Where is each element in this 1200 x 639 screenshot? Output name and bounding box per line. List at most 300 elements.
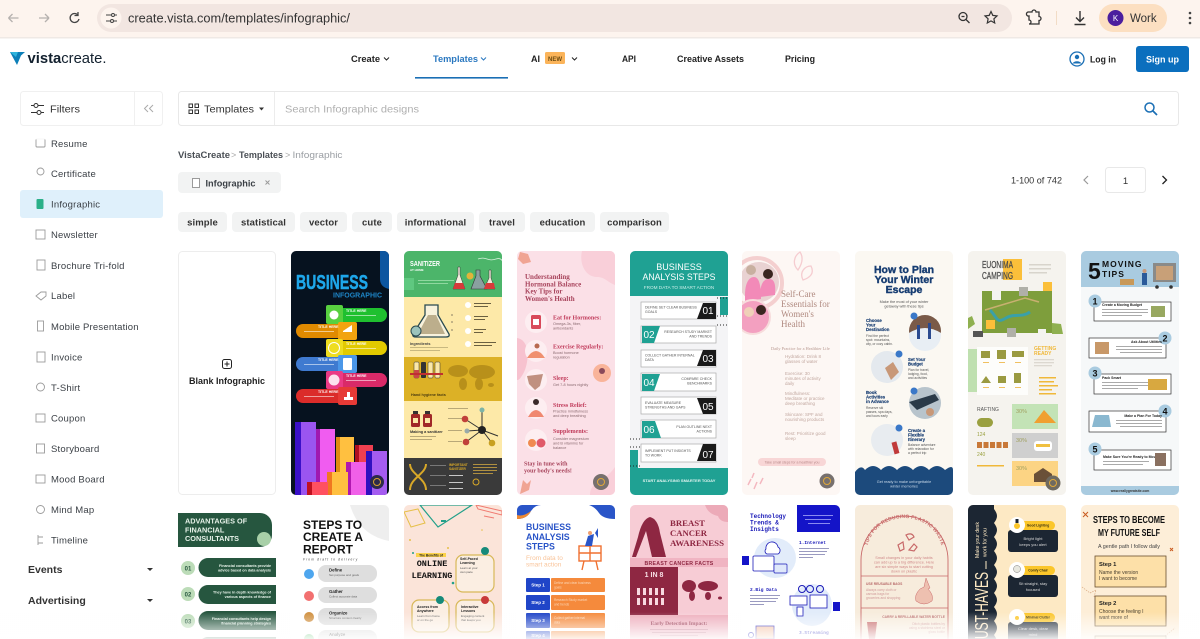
template card: self-care essentials: Rest: Prioritize good [785, 431, 826, 436]
tag chips: vector [309, 218, 338, 228]
list rows: 03 [185, 620, 192, 626]
tip boxes [1089, 302, 1171, 470]
list rows: They have in depth knowledge of [213, 590, 272, 594]
template card: technology trends: 1.Internet [799, 540, 826, 546]
desk items: mind [1029, 632, 1037, 637]
template card: self-care essentials: Take small steps for a healthier you [765, 460, 819, 464]
template card: reducing plastic waste: groceries and shopping [866, 596, 900, 600]
tips: antioxidants [553, 326, 573, 330]
tips: Supplements: [553, 429, 588, 435]
template card: sanitizer: SANITIZER [410, 259, 440, 268]
top navigation: Pricing [785, 54, 815, 65]
logo: vistacreate: vistacreate. [28, 50, 106, 67]
template card: winter escape: Itinerary [908, 437, 926, 442]
desk items: Minimal Clutter [1026, 616, 1051, 620]
template card: moving tips: Make a Plan For Today [1124, 414, 1162, 418]
template card: business analysis steps orange: Step 2 [531, 600, 545, 605]
template card: online learning [404, 505, 502, 639]
step boxes [1095, 556, 1166, 639]
dna [410, 464, 426, 490]
sidebar categories: Timeline [51, 536, 88, 546]
tips: Practice mindfulness [553, 410, 588, 414]
template card: self-care essentials: Mindfulness: [785, 391, 810, 396]
tips: Get 7-8 hours nightly [553, 383, 588, 387]
template card: financial consultants: CONSULTANTS [185, 534, 239, 543]
template card: reducing plastic waste: canvas bags for [866, 592, 890, 596]
tips [553, 316, 603, 450]
profile chip: Work [1130, 13, 1157, 25]
template card: business analysis steps orange: goals [554, 586, 562, 590]
sign up button: Sign up [1146, 54, 1179, 66]
step boxes: Step 1 [1099, 562, 1117, 568]
flasks [453, 258, 503, 289]
desk items: Clear desk, clear [1018, 626, 1049, 631]
template card: business analysis steps: 06 [643, 425, 655, 436]
sidebar categories: Invoice [51, 352, 83, 364]
template card: business analysis steps: 07 [702, 450, 714, 461]
template card: desk must-haves: Make your desk [975, 521, 981, 558]
list rows: Financial consultants provide [219, 564, 271, 568]
template card: reducing plastic waste: glass bottle [928, 630, 945, 634]
tips: regulation [553, 356, 570, 360]
template card: winter escape: getaway with these tips [884, 304, 924, 308]
dotted decorations [630, 297, 728, 468]
template card: business analysis steps orange: Define and clear business [554, 581, 591, 585]
template card: sanitizer [404, 251, 503, 495]
template card: self-care essentials: Skincare: SPF and [785, 412, 823, 417]
template card: business analysis steps orange: smart action [526, 562, 562, 568]
top navigation: API [622, 54, 636, 65]
search box: Templates [204, 104, 254, 116]
breadcrumb: > [231, 150, 236, 160]
template card: technology trends: Insights [750, 526, 779, 533]
breadcrumb: > [285, 150, 290, 160]
big flask [411, 305, 453, 337]
template card: online learning: LEARNING [412, 571, 452, 581]
steps [641, 302, 716, 462]
list rows: 02 [185, 592, 192, 598]
selected item background [20, 190, 163, 218]
template card: winter escape: How to Plan [874, 264, 934, 276]
template card: euonima camping: GETTING [1034, 346, 1056, 352]
template card: business analysis steps orange: BUSINESS [526, 522, 571, 532]
template card: steps to create a report: Gather [329, 589, 343, 594]
template card: business analysis steps: 05 [702, 402, 714, 413]
login: Log in [1090, 54, 1116, 66]
top navigation: AI [531, 54, 540, 65]
template card: winter escape: Budget [908, 362, 923, 366]
template card: business analysis steps: PLAN OUTLINE NEXT [676, 425, 713, 429]
template card: reducing plastic waste: Small changes in your daily habits [875, 556, 933, 560]
template card: sanitizer: SANITIZER [449, 467, 467, 471]
template card: steps to create a report: Collect accurate data [329, 594, 358, 598]
template card: self-care essentials: Essentials for [781, 299, 830, 309]
template card: winter escape: Get ready to make unforgettable [877, 480, 931, 484]
template card: business analysis steps: 03 [702, 354, 714, 365]
template card: winter escape: Plan for travel, [908, 368, 929, 372]
template card: self-care essentials: Daily Practice for a Healthier Life [771, 346, 830, 351]
template card: business analysis steps: IMPLEMENT PUT INSIGHTS [645, 449, 691, 453]
numbered circles: 2 [1162, 334, 1168, 344]
step boxes: Choose the feeling I [1099, 609, 1143, 615]
icon: zoom [959, 12, 970, 23]
icon: site settings [100, 8, 122, 28]
ribbons: TITLE HERE [318, 325, 339, 329]
heading: Hormonal Balance [525, 280, 581, 288]
template card: online learning: Engaging content [461, 614, 485, 618]
template card: steps to become my future self [1081, 505, 1179, 639]
template card: winter escape: in Advance [866, 399, 889, 404]
template card: business analysis steps: GOALS [645, 310, 658, 314]
template card: online learning: Lessons [461, 609, 475, 613]
tag chips: comparison [607, 218, 662, 228]
list rows: various aspects of finance [225, 595, 271, 599]
template card: winter escape: Choose [866, 318, 882, 323]
step boxes: Step 2 [1099, 601, 1116, 607]
template card: business analysis steps: AND TRENDS [689, 334, 713, 338]
icon: menu dots [1189, 12, 1191, 24]
template card: winter escape: winter memories [890, 484, 918, 488]
template card: online learning: Learn at your [460, 566, 478, 570]
sidebar categories: Certificate [51, 169, 96, 180]
template card: online learning: or on the go [417, 618, 433, 622]
template card: winter escape: Create a [908, 428, 926, 433]
template card: online learning: Learn from home [417, 614, 440, 618]
blank infographic card [178, 252, 276, 494]
template card: moving tips: MOVING [1102, 259, 1142, 269]
sidebar categories: T-Shirt [51, 383, 81, 394]
top navigation: Create [351, 54, 380, 65]
tag chips: statistical [241, 218, 286, 228]
ribbons: TITLE HERE [346, 374, 367, 378]
template card: moving tips: Make Sure You're Ready to Move [1103, 455, 1158, 459]
filters box [20, 92, 162, 126]
template card: self-care essentials: glasses of water [785, 359, 818, 364]
ribbons [296, 305, 387, 405]
template card: euonima camping: READY [1034, 351, 1052, 357]
list rows: advice based on data analysis [218, 568, 271, 572]
moving truck [1120, 263, 1176, 289]
step boxes: Name the version [1099, 570, 1138, 576]
numbered circles: 3 [1092, 368, 1098, 378]
stat boxes: 30% [1016, 438, 1027, 444]
template card: euonima camping [968, 251, 1066, 495]
sidebar categories: Mobile Presentation [51, 322, 139, 333]
tips: Omega-3s, fiber, [553, 322, 581, 326]
template card: business analysis steps: ANALYSIS STEPS [642, 272, 716, 282]
template card: online learning: Access from [417, 605, 438, 609]
template card: self-care essentials: Women's [781, 309, 814, 319]
template card: business analysis steps: RESEARCH STUDY MARKET [664, 330, 713, 334]
icon: back arrow [8, 14, 18, 22]
template card: online learning: Self-Paced [460, 557, 478, 561]
template card: winter escape: spot: mountains, [866, 338, 890, 342]
desk items: Comfy Chair [1028, 568, 1049, 572]
breadcrumb: VistaCreate [178, 150, 230, 161]
url text: create.vista.com/templates/infographic/ [128, 12, 351, 26]
template card: steps to become my future self: STEPS TO BECOME [1093, 514, 1165, 526]
desk items: Bright light [1024, 536, 1043, 541]
template card: steps to create a report: Analyze [329, 632, 346, 637]
template card: technology trends: 3.Streaming [799, 630, 829, 636]
sidebar categories: Events [28, 564, 63, 576]
sidebar categories: Coupon [51, 414, 85, 424]
breadcrumb [178, 150, 343, 161]
vials [410, 362, 443, 378]
blank infographic card: Blank Infographic [189, 376, 265, 387]
tag chips: cute [362, 218, 382, 228]
sign up button [1136, 46, 1189, 72]
sidebar categories: Mind Map [51, 505, 94, 516]
template card: breast cancer awareness [630, 505, 728, 639]
template card: reducing plastic waste [855, 505, 953, 639]
template card: business analysis steps orange: From data to [526, 555, 563, 562]
template card: winter escape: Make the most of your winter [880, 300, 929, 304]
template card: self-care essentials: daily [785, 381, 795, 386]
sidebar categories: Infographic [51, 200, 100, 210]
template card: moving tips: www.reallygreatsite.com [1110, 489, 1149, 493]
pagination [1011, 168, 1166, 192]
top navigation: NEW [548, 57, 562, 63]
template card: business analysis steps: COLLECT GATHER INTERNAL [645, 354, 695, 358]
template card: winter escape: Activities [866, 394, 886, 400]
template card: business infographic [291, 251, 389, 495]
template card: winter escape: Flexible [908, 432, 925, 438]
template card: business analysis steps orange: Step 3 [531, 618, 545, 623]
template card: sanitizer: Making a sanitizer [410, 430, 443, 434]
top navigation [351, 52, 815, 79]
tips: and deep breathing [553, 414, 586, 418]
template card: breast cancer awareness: 1 IN 8 [645, 572, 663, 579]
template card: business analysis steps: BUSINESS [656, 262, 702, 272]
template card: breast cancer awareness: Early Detection Impact: [651, 621, 708, 627]
template card: business analysis steps orange: data [554, 620, 560, 624]
template card: self-care essentials: Hydration: Drink 8 [785, 354, 822, 359]
tips: balance [553, 446, 566, 450]
3d bars [295, 422, 387, 495]
active filter chip [178, 172, 281, 193]
template card: steps to create a report [303, 505, 389, 639]
desk items: focused [1026, 587, 1040, 592]
template card: steps to create a report: Set purpose and goals [329, 573, 360, 577]
filters box: Filters [50, 104, 80, 116]
tips: Eat for Hormones: [553, 316, 601, 322]
numbered circles: 4 [1162, 406, 1168, 416]
template card: self-care essentials: Health [781, 319, 805, 329]
template card: online learning: Learning [460, 561, 475, 565]
template card: financial consultants [178, 505, 276, 639]
heading: Key Tips for [525, 288, 562, 296]
heading [525, 273, 581, 303]
template card: hormonal balance [517, 251, 615, 495]
ribbons: TITLE HERE [318, 358, 339, 362]
browser toolbar [0, 0, 1200, 38]
template card: business analysis steps: STRENGTHS AND GAPS [645, 406, 686, 410]
stat boxes [1012, 404, 1058, 486]
template card: business analysis steps orange: Step 1 [531, 582, 545, 588]
stat boxes: 30% [1016, 409, 1027, 415]
heading: Women's Health [525, 295, 575, 303]
template card: self-care essentials: Self-Care [781, 289, 815, 299]
template card: business infographic: BUSINESS [296, 272, 368, 294]
template card: self-care essentials: Meditate or practice [785, 396, 825, 401]
numbered circles: 5 [1092, 444, 1098, 454]
icons [916, 578, 932, 604]
sidebar categories: Advertising [28, 595, 86, 607]
world map [682, 580, 722, 601]
template card: online learning: Anywhere [417, 609, 434, 613]
template card: business analysis steps: 04 [643, 378, 655, 389]
template card: online learning: own pace [460, 570, 473, 574]
ribbons: TITLE HERE [318, 390, 339, 394]
template card: winter escape: with relaxation for [908, 447, 935, 451]
template card: winter escape: Escape [886, 284, 923, 296]
template card: breast cancer awareness: CANCER [670, 528, 708, 538]
template card: steps to create a report: CREATE A [303, 530, 363, 544]
template card: business analysis steps orange: Research Study market [554, 598, 587, 602]
tips: Sleep: [553, 376, 569, 382]
template card: steps to create a report: Structure content clearly [329, 616, 362, 620]
template card: moving tips [1081, 251, 1179, 495]
template card: breast cancer awareness: AWARENESS [670, 538, 724, 548]
bottles [411, 411, 432, 427]
active filter chip: Infographic [206, 178, 256, 190]
template card: online learning: The Benefits of [419, 554, 444, 558]
template card: winter escape: Your [866, 322, 876, 328]
template card: winter escape: Find the perfect [866, 334, 889, 338]
tag chips: travel [489, 218, 515, 228]
template card: business analysis steps: BENCHMARKS [687, 382, 713, 386]
template card: steps to become my future self: A gentle path I follow daily [1098, 544, 1160, 550]
molecule [462, 408, 498, 446]
template card: winter escape: and activities [908, 376, 927, 380]
template card: reducing plastic waste: Always carry cloth or [866, 588, 897, 592]
tips: Consider magnesium [553, 437, 589, 441]
template card: breast cancer awareness: BREAST [670, 518, 705, 528]
template card: business analysis steps: START ANALYSING SMARTER TODAY [643, 478, 716, 483]
icon: reload [70, 12, 79, 22]
tag chips: simple [187, 218, 218, 228]
template card: moving tips: 5 [1088, 258, 1101, 284]
template card: technology trends: 2.Big Data [750, 587, 777, 593]
template card: desk must-haves: work for you [982, 528, 988, 557]
sidebar categories: Newsletter [51, 230, 98, 241]
top navigation: Creative Assets [677, 54, 744, 65]
template card: winter escape: Your Winter [875, 274, 933, 286]
list rows: Financial consultants help design [212, 617, 272, 621]
template card: technology trends [742, 505, 840, 639]
template card: reducing plastic waste: TIPS FOR REDUCING PLASTIC WASTE [864, 514, 944, 546]
illustrations [742, 538, 840, 639]
stat boxes: 30% [1016, 466, 1027, 472]
template card: steps to create a report: STEPS TO [303, 518, 362, 532]
icon: star [985, 12, 997, 23]
list rows [181, 558, 276, 639]
template card: steps to create a report: From draft to delivery [303, 558, 358, 562]
tag chips: informational [405, 218, 466, 228]
template card: online learning: that keeps you [461, 618, 481, 622]
template card: reducing plastic waste: Ditch plastic bottles by [912, 622, 945, 626]
template card: self-care essentials: deep breathing [785, 401, 816, 406]
template card: moving tips: Pack Smart [1102, 376, 1122, 380]
template card: business analysis steps orange [517, 505, 615, 639]
sidebar categories: Label [51, 291, 75, 302]
template card: euonima camping: 124 [977, 432, 986, 438]
template card: self-care essentials [732, 251, 840, 495]
template card: business analysis steps orange: Collect gather internal [554, 616, 585, 620]
template card: self-care essentials: minutes of activity [785, 376, 822, 381]
template card: moving tips: TIPS [1102, 269, 1125, 279]
template card: winter escape: lodging, food, [908, 372, 928, 376]
icon circles [525, 311, 611, 451]
step boxes: I want to become [1099, 576, 1137, 582]
template card: euonima camping: RAFTING [977, 407, 999, 413]
template card: reducing plastic waste: are six simple ways to start cutting [875, 565, 933, 569]
template card: business analysis steps: DEFINE SET CLEAR BUSINESS [645, 306, 698, 310]
template card: business analysis steps: 02 [643, 330, 655, 341]
template card: steps to create a report: Define [329, 568, 343, 572]
template card: financial consultants: ADVANTAGES OF [185, 516, 248, 526]
template card: business analysis steps: 01 [702, 306, 714, 317]
template card: winter escape [855, 251, 953, 495]
template card: winter escape: a perfect trip [908, 451, 926, 455]
template card: hormonal balance: Stay in tune with [524, 462, 568, 468]
tips: Stress Relief: [553, 403, 587, 409]
list rows: financial planning strategies [221, 622, 271, 626]
pagination: 1 [1123, 176, 1128, 187]
template card: online learning: Interactive [461, 605, 479, 609]
template card: euonima camping: EUONIMA [982, 260, 1013, 271]
desk items [1008, 517, 1058, 639]
tips: Exercise Regularly: [553, 344, 603, 350]
heading: Understanding [525, 273, 570, 281]
profile chip: K [1113, 14, 1119, 23]
address bar [97, 4, 1012, 32]
sidebar categories [20, 128, 170, 607]
tag chips: education [540, 218, 585, 228]
icon: extensions [1026, 10, 1041, 24]
template card: reducing plastic waste: can add up to a big difference. Here [874, 560, 934, 564]
template card: steps to become my future self: MY FUTURE SELF [1098, 527, 1160, 539]
template card: moving tips: Ask About Utilities [1131, 340, 1162, 344]
template card: sanitizer: IMPORTANT [449, 463, 468, 467]
template card: steps to create a report: Organize [329, 610, 348, 616]
sidebar categories: Brochure Tri-fold [51, 261, 125, 272]
breadcrumb: Infographic [292, 150, 343, 161]
template card: business analysis steps: EVALUATE MEASURE [645, 401, 682, 405]
template card: business analysis steps: ACTIONS [696, 430, 713, 434]
template card: business analysis steps orange: ANALYSIS [526, 532, 570, 542]
search box [178, 92, 1178, 126]
bottom fade overlay [0, 612, 1200, 639]
template card: technology trends: Technology [750, 513, 786, 520]
template card: winter escape: city, or cozy cabin. [866, 342, 893, 346]
template card: self-care essentials: nourishing products [785, 417, 825, 422]
template card: online learning: ONLINE [417, 559, 447, 569]
presenter figure [579, 528, 601, 570]
template card: moving tips: Create a Moving Budget [1102, 303, 1143, 307]
photos [871, 312, 941, 456]
template card: business analysis steps [630, 251, 728, 495]
template card: desk must-haves [968, 505, 1066, 639]
numbered circles [1088, 294, 1172, 456]
icon: download [1074, 11, 1086, 24]
template card: winter escape: Reserve ski [866, 406, 883, 410]
template card: business infographic: INFOGRAPHIC [333, 292, 382, 300]
desk items: Sit straight, stay [1019, 581, 1047, 586]
map [968, 282, 1063, 337]
template card: sanitizer: Hand hygiene facts [411, 393, 446, 397]
